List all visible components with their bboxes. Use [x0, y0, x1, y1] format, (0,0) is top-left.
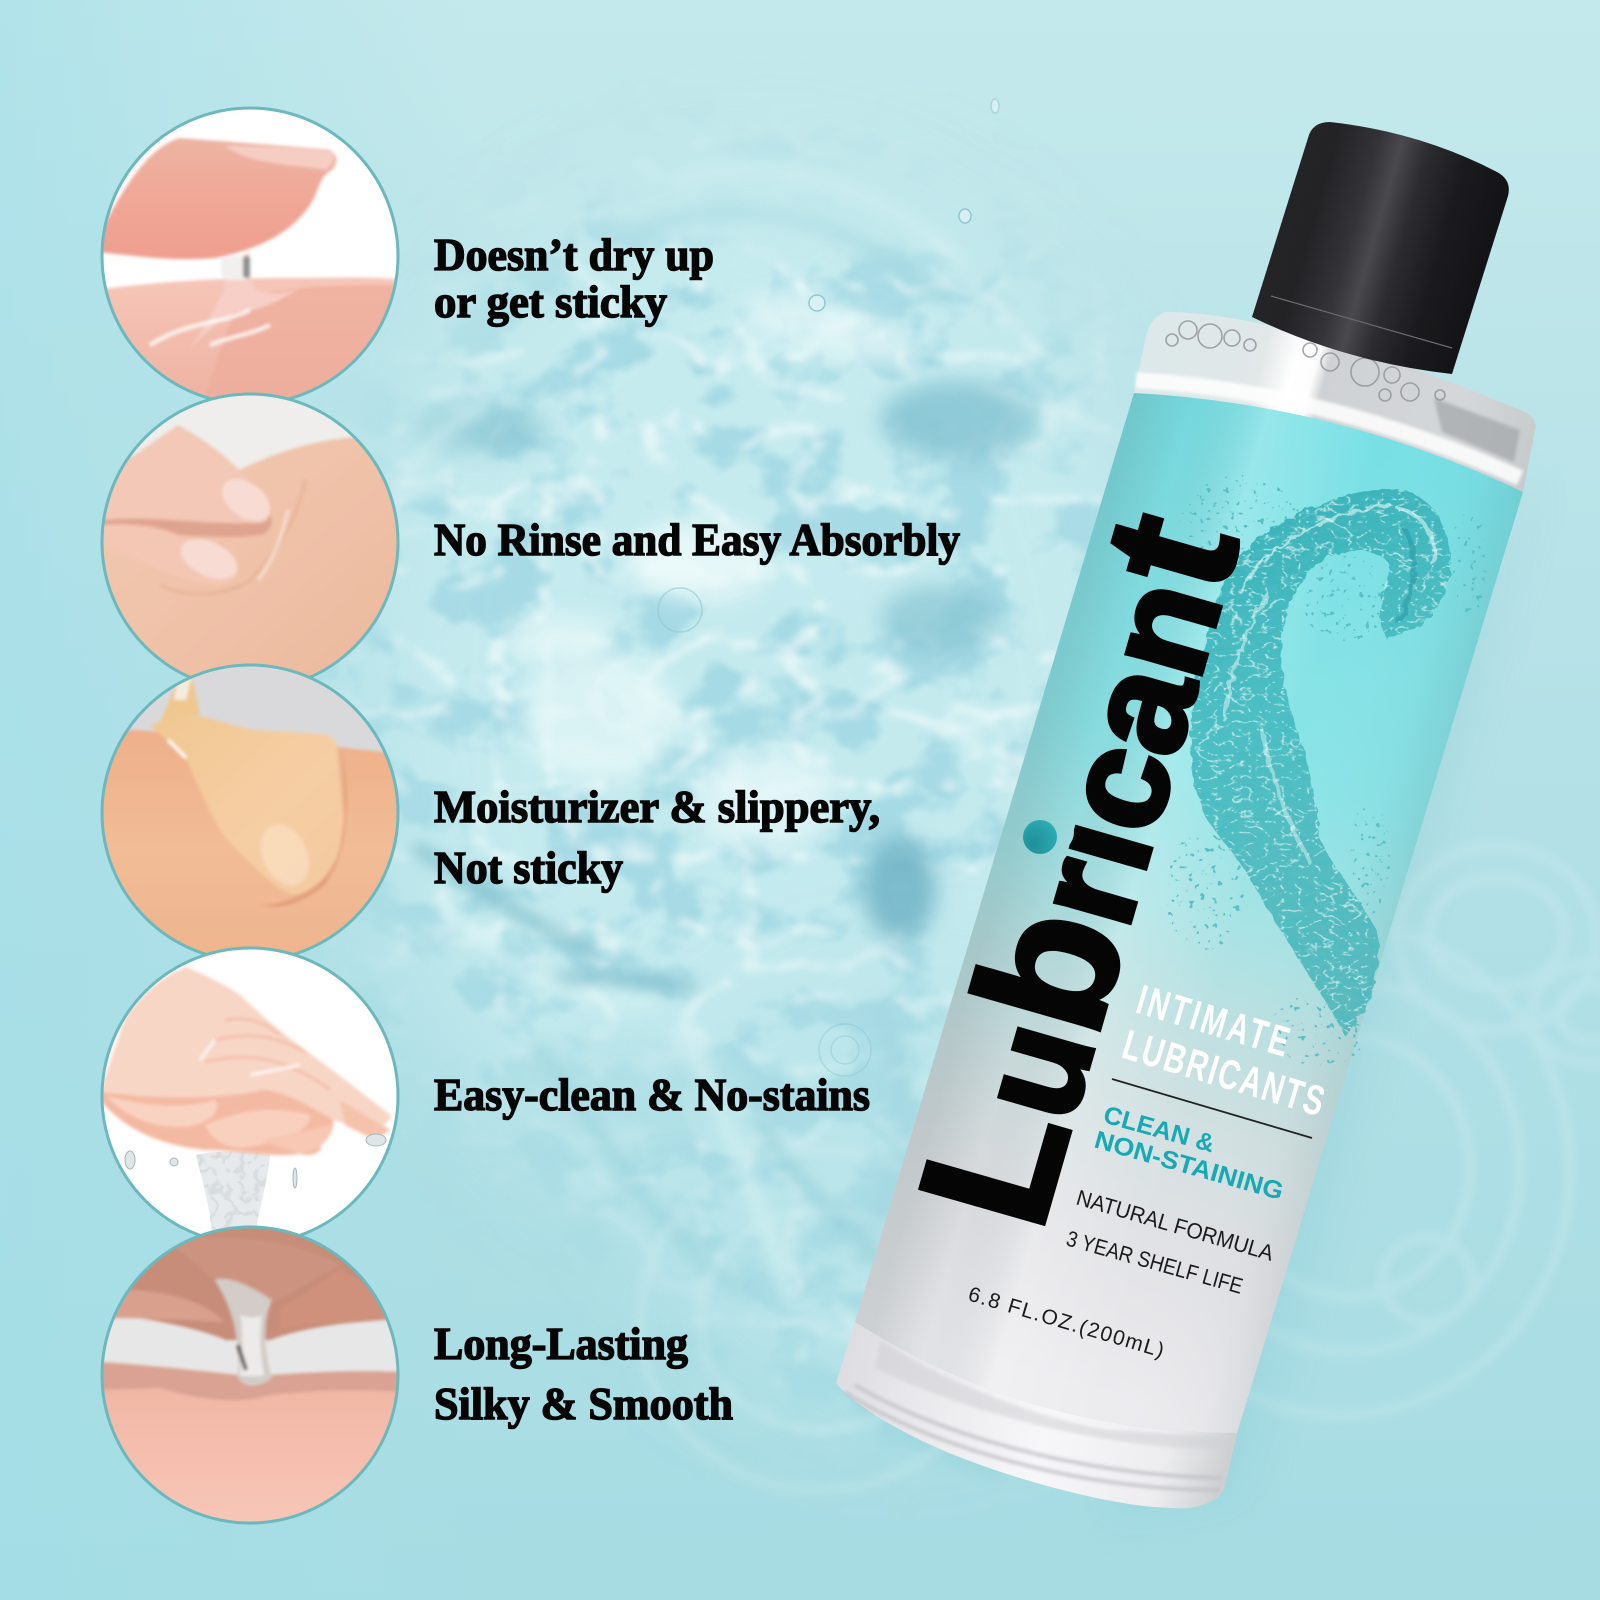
brand dot	[1023, 820, 1057, 854]
radial water streaks	[380, 170, 1000, 1470]
benefit 3 text: Moisturizer & slippery,	[434, 781, 880, 832]
photo circle 5: gel stretching between fingers	[100, 1220, 402, 1530]
ripple rings	[640, 846, 1600, 1490]
photo circle 1: finger with gel	[95, 108, 402, 410]
bottle base	[836, 1322, 1237, 1508]
photo circle 2: fingers on skin	[100, 394, 402, 700]
benefit 1 text: Doesn’t dry up	[434, 229, 714, 280]
heading: intimate lubricants: INTIMATE	[1131, 975, 1295, 1066]
product claims: 3 YEAR SHELF LIFE	[1064, 1226, 1246, 1299]
water droplets	[658, 99, 999, 1076]
benefit 3 text	[434, 781, 880, 893]
benefit 5 text: Long-Lasting	[434, 1318, 688, 1369]
water splash	[336, 220, 1122, 1388]
product claims	[1064, 1185, 1277, 1299]
claim: clean and non-staining: CLEAN &	[1100, 1101, 1218, 1158]
product bottle	[836, 122, 1540, 1520]
clear bottle shoulder	[1134, 312, 1536, 492]
benefit 5 text: Silky & Smooth	[434, 1378, 733, 1429]
wave streaks	[1225, 505, 1434, 865]
heading: intimate lubricants: LUBRICANTS	[1117, 1020, 1330, 1125]
wave graphic	[1165, 475, 1486, 1066]
bottle shadow	[1100, 460, 1540, 1520]
benefit 1 text	[434, 229, 714, 327]
benefit 1 text: or get sticky	[434, 276, 667, 327]
cap	[1252, 122, 1509, 374]
benefit 5 text	[434, 1318, 733, 1429]
benefit 2 text: No Rinse and Easy Absorbly	[434, 514, 960, 565]
falling water	[196, 1151, 270, 1235]
benefit 3 text: Not sticky	[434, 842, 623, 893]
photo circle 4: washing hands	[100, 948, 398, 1244]
heading: intimate lubricants	[1117, 975, 1330, 1125]
benefit 4 text: Easy-clean & No-stains	[434, 1069, 870, 1120]
photo circle 3: amber gel on skin	[100, 665, 402, 970]
brand name: Lubricant	[880, 493, 1278, 1246]
product claims: NATURAL FORMULA	[1074, 1185, 1277, 1266]
claim: clean and non-staining	[1091, 1101, 1287, 1206]
volume: 6.8 FL.OZ.(200mL)	[966, 1283, 1167, 1362]
label	[855, 393, 1523, 1433]
splash droplets	[1165, 475, 1486, 1066]
claim: clean and non-staining: NON-STAINING	[1091, 1126, 1287, 1206]
